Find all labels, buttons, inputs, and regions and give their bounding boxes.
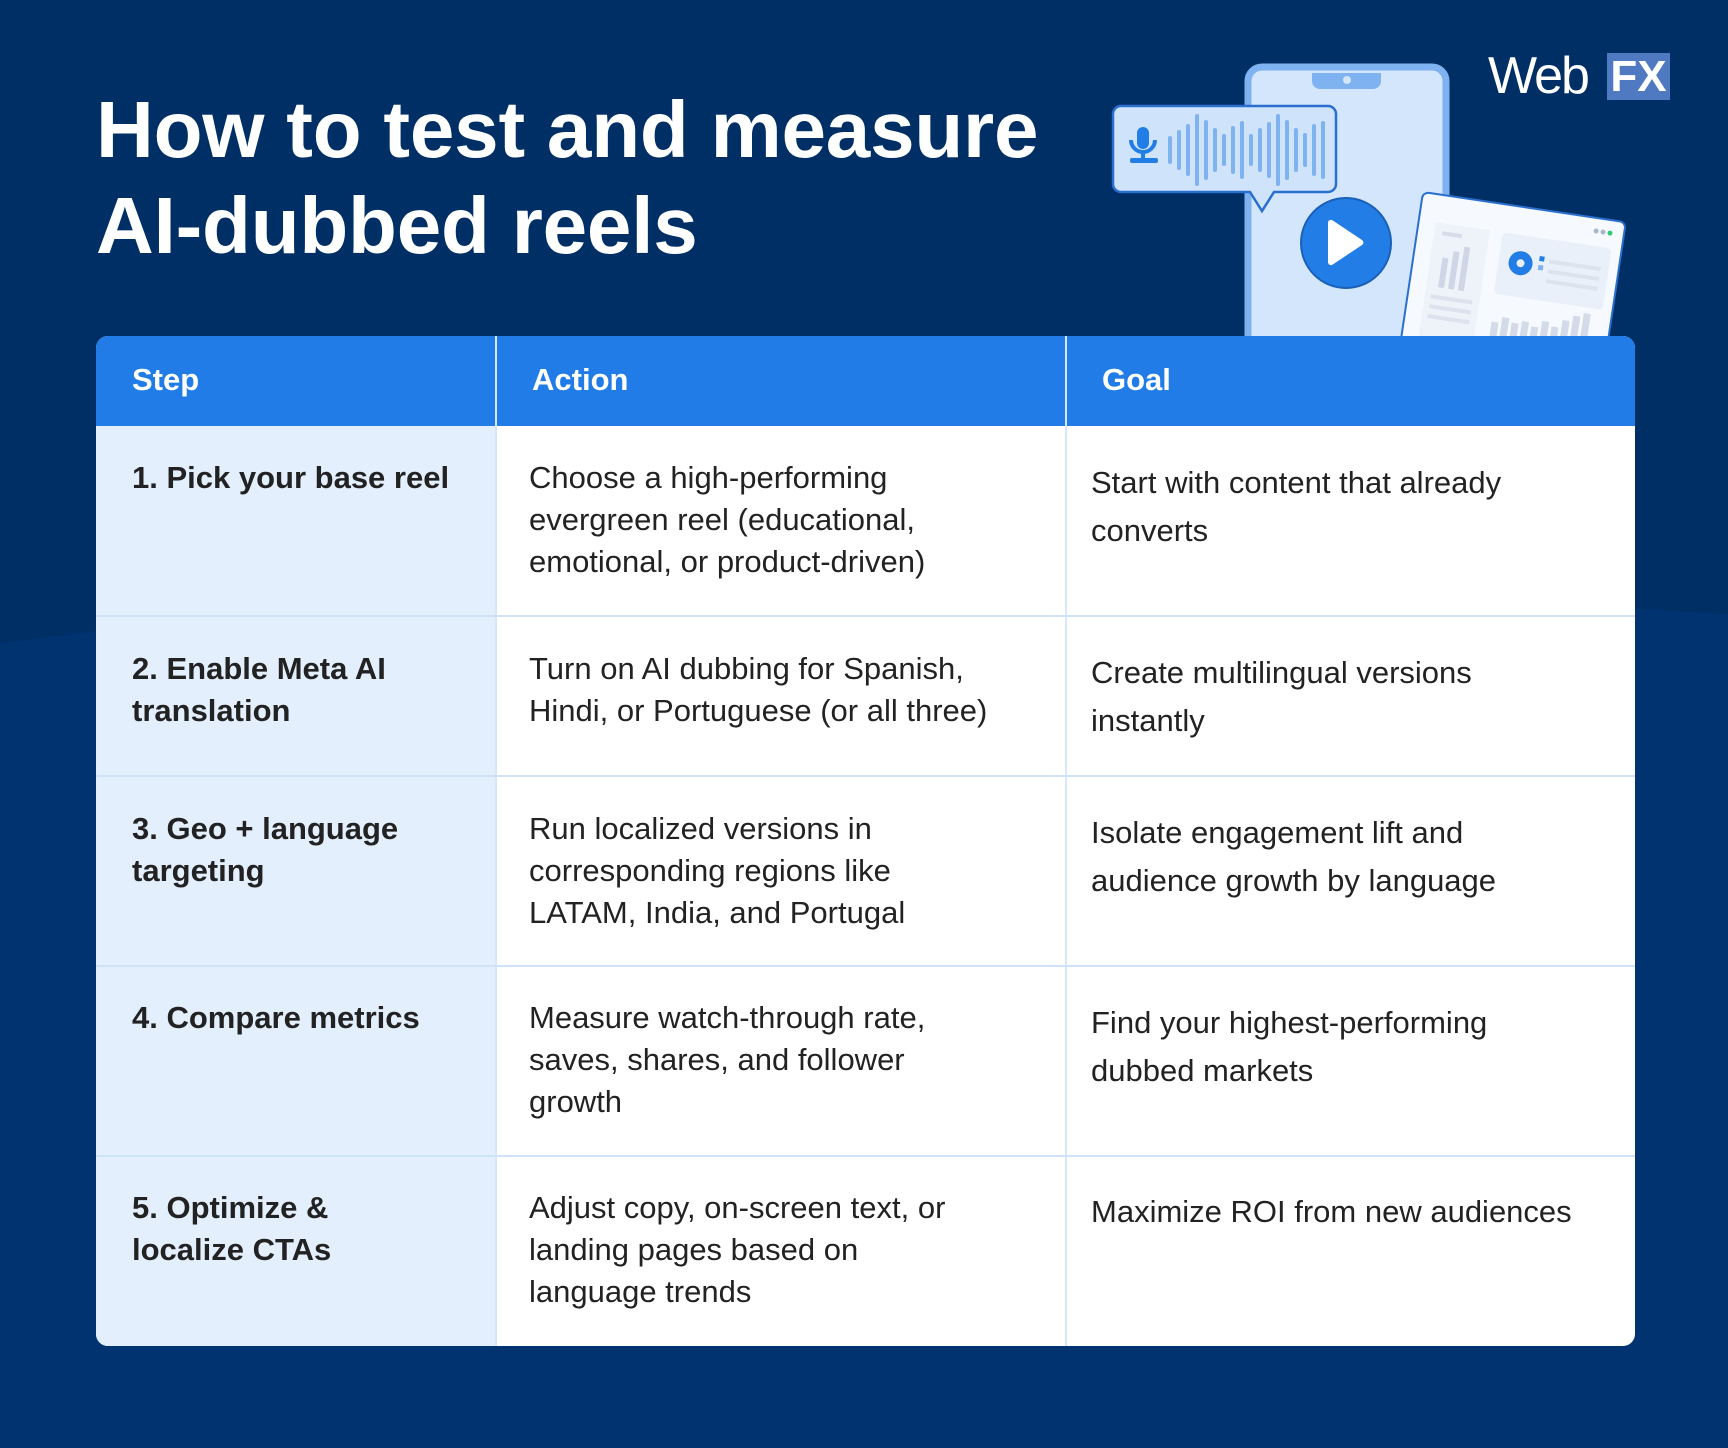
text: Action <box>532 362 628 397</box>
text: Start with content that already <box>1091 465 1501 500</box>
row 2 <box>132 651 386 728</box>
row 1: 1. Pick your base reel <box>132 460 449 495</box>
text: Hindi, or Portuguese (or all three) <box>529 693 987 728</box>
text: Isolate engagement lift and <box>1091 815 1463 850</box>
row 3 <box>132 811 398 888</box>
text: dubbed markets <box>1091 1052 1313 1088</box>
illustration: phone with audio bubble and dashboard <box>1112 64 1626 336</box>
row 3: targeting <box>132 853 265 888</box>
text: LATAM, India, and Portugal <box>529 895 905 930</box>
text: Adjust copy, on-screen text, or <box>529 1190 945 1225</box>
text: emotional, or product-driven) <box>529 544 925 579</box>
text: Run localized versions in <box>529 811 872 846</box>
text: language trends <box>529 1274 751 1309</box>
text: Goal <box>1102 362 1171 397</box>
row 5 <box>132 1190 331 1267</box>
dashboard card <box>1396 192 1626 400</box>
title <box>96 85 1038 270</box>
table <box>96 336 1635 1346</box>
text: saves, shares, and follower <box>529 1042 905 1077</box>
logo: WebFX: Web <box>1488 47 1588 105</box>
table header: Step <box>132 362 199 397</box>
text: converts <box>1091 512 1208 548</box>
text: landing pages based on <box>529 1232 858 1267</box>
text: Choose a high-performing <box>529 460 887 495</box>
text: Maximize ROI from new audiences <box>1091 1194 1572 1229</box>
title: How to test and measure <box>96 85 1038 174</box>
row 4: 4. Compare metrics <box>132 1000 420 1035</box>
row 3: 3. Geo + language <box>132 811 398 846</box>
text: instantly <box>1091 702 1205 738</box>
text: Find your highest-performing <box>1091 1005 1487 1040</box>
play button <box>1301 198 1391 288</box>
row 2: 2. Enable Meta AI <box>132 651 386 686</box>
logo: WebFX <box>1488 47 1670 105</box>
text: evergreen reel (educational, <box>529 502 915 537</box>
row 5: localize CTAs <box>132 1232 331 1267</box>
text: growth <box>529 1084 622 1119</box>
text: Measure watch-through rate, <box>529 1000 925 1035</box>
speech bubble with mic and waveform <box>1113 106 1336 211</box>
text: corresponding regions like <box>529 853 891 888</box>
logo: WebFX: FX <box>1610 52 1667 101</box>
text: Create multilingual versions <box>1091 655 1472 690</box>
phone <box>1248 67 1446 367</box>
row 5: 5. Optimize & <box>132 1190 328 1225</box>
text: audience growth by language <box>1091 862 1496 898</box>
title: AI-dubbed reels <box>96 181 698 270</box>
row 2: translation <box>132 693 290 728</box>
text: Turn on AI dubbing for Spanish, <box>529 651 964 686</box>
